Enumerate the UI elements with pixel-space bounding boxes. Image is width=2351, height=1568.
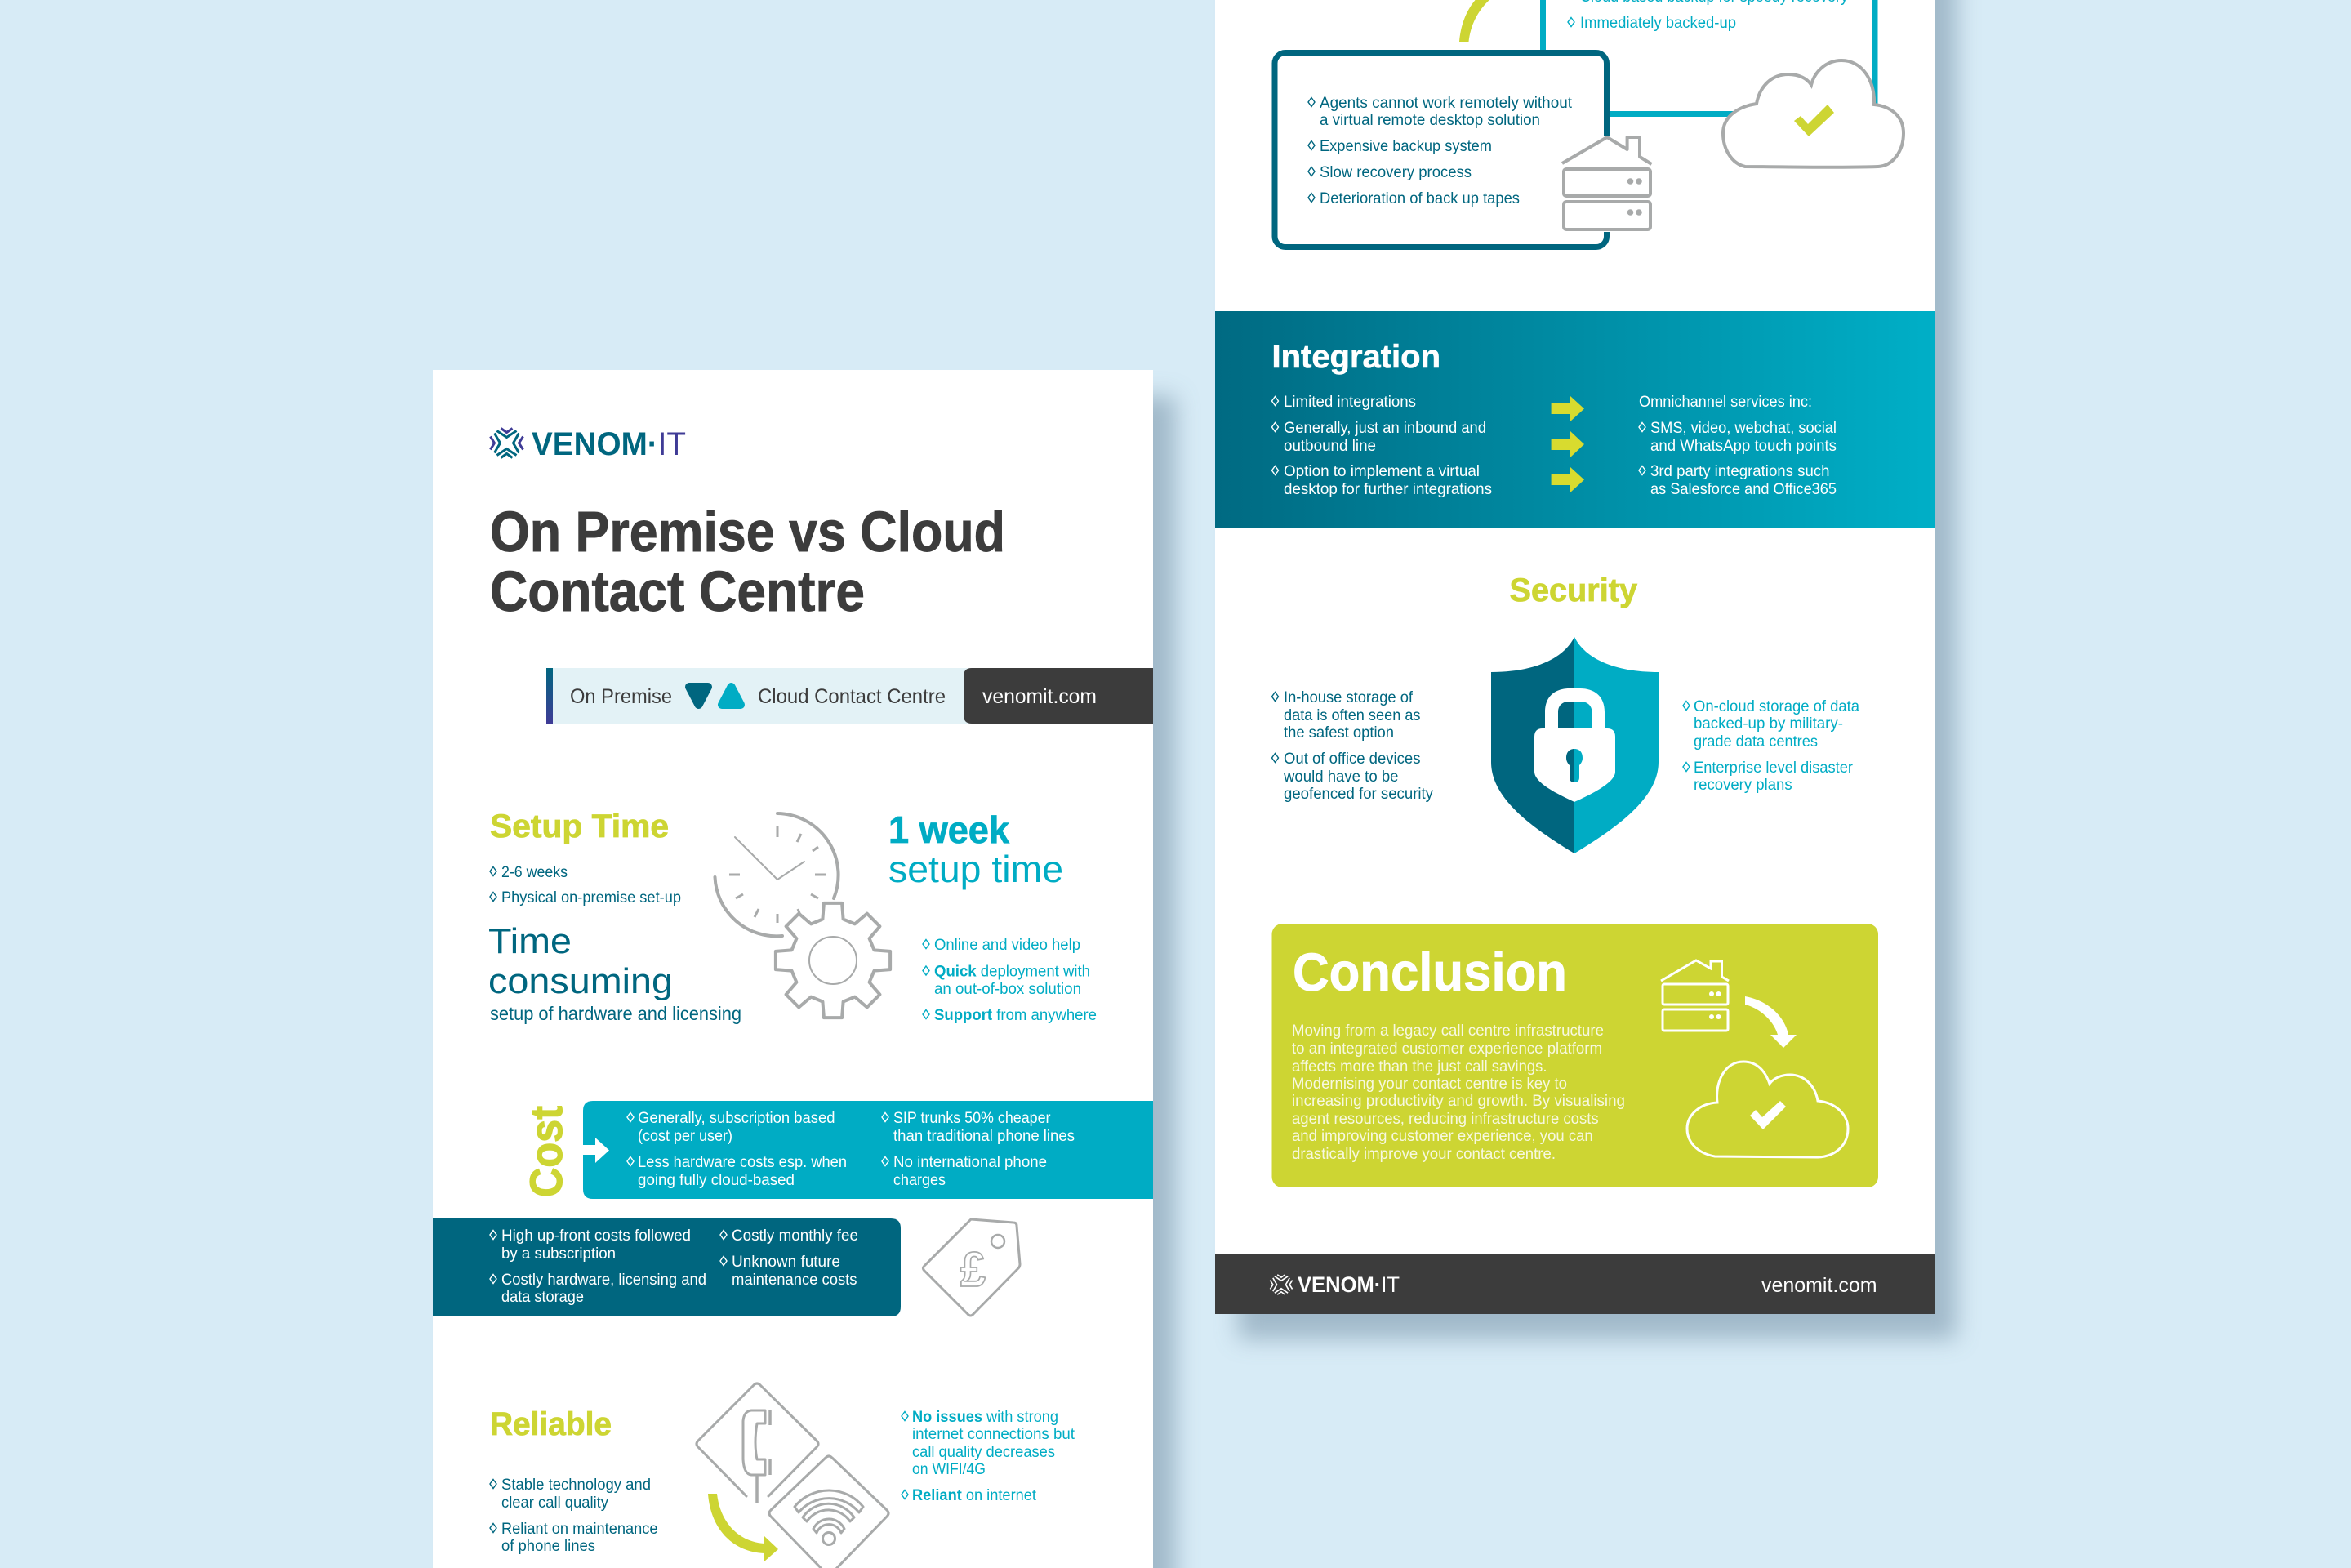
panel shadow: right	[1238, 0, 1957, 1339]
list: on premise cost left: data storage	[501, 1289, 584, 1306]
list: cloud setup: an out-of-box solution	[934, 981, 1081, 998]
list: on premise reliability: of phone lines	[501, 1538, 595, 1555]
footer bar	[1215, 1254, 1935, 1314]
list: on premise reliability: clear call quality	[501, 1494, 608, 1512]
list: cloud cost right: No international phone	[893, 1154, 1047, 1171]
list: cloud integration: and WhatsApp touch points	[1650, 438, 1837, 455]
list: cloud setup	[923, 937, 1097, 1024]
list: on premise integration: outbound line	[1284, 438, 1376, 455]
list: on premise cost left	[490, 1227, 706, 1306]
list: on premise security: would have to be	[1283, 768, 1398, 786]
panel: conclusion	[1272, 924, 1878, 1187]
list: cloud cost left	[627, 1110, 847, 1189]
text: conclusion body: to an integrated customer experience platform	[1292, 1040, 1602, 1058]
list: cloud reliability: call quality decreases	[912, 1444, 1055, 1461]
list: on premise cost right: Costly monthly fee	[732, 1227, 858, 1245]
cloud backup frame	[1543, 0, 1875, 114]
panel: left infographic page	[433, 370, 1153, 1568]
list: on premise cost right	[720, 1227, 858, 1289]
icon: cloud white	[1687, 1062, 1848, 1157]
list: on premise backup: a virtual remote desktop solution	[1320, 112, 1540, 129]
list: on premise integration: Limited integrations	[1284, 394, 1416, 411]
title: On Premise vs Cloud	[490, 500, 1005, 564]
list: cloud reliability: Reliant on internet	[912, 1487, 1037, 1504]
text: conclusion body: Modernising your contact centre is key to	[1292, 1076, 1567, 1093]
list: cloud security: recovery plans	[1694, 777, 1792, 794]
list: cloud integration: as Salesforce and Office365	[1650, 481, 1837, 498]
text: conclusion body: drastically improve your contact centre.	[1292, 1146, 1556, 1163]
heading: Reliable: Reliable	[490, 1406, 612, 1442]
icon: price tag	[923, 1219, 1020, 1316]
callout: time consuming: Time	[488, 921, 572, 961]
heading: Security: Security	[1509, 572, 1638, 608]
icon: price tag: £	[960, 1242, 986, 1297]
list: cloud cost left: Less hardware costs esp. when	[638, 1154, 847, 1171]
heading: Cost (vertical): Cost	[520, 1106, 572, 1197]
icon: clock	[715, 813, 839, 936]
list: cloud security	[1683, 698, 1859, 794]
list: cloud security: backed-up by military-	[1694, 715, 1843, 733]
list: cloud setup: Online and video help	[934, 937, 1080, 954]
list: cloud integration: Omnichannel services inc:	[1639, 394, 1812, 411]
text: conclusion body: increasing productivity and growth. By visualising	[1292, 1093, 1625, 1110]
list: cloud security: grade data centres	[1694, 733, 1818, 751]
callout: time consuming: setup of hardware and licensing	[490, 1003, 741, 1024]
list: on premise backup: Deterioration of back up tapes	[1320, 190, 1520, 207]
icon: shield with padlock	[1491, 637, 1659, 853]
arrow: lime curve fragment	[1459, 0, 1491, 42]
list: on premise integration: Generally, just an inbound and	[1284, 420, 1486, 437]
callout: time consuming: consuming	[488, 961, 673, 1001]
callout: 1 week setup time	[888, 808, 1063, 890]
title: Contact Centre	[490, 559, 865, 623]
heading: Conclusion: Conclusion	[1293, 942, 1567, 1002]
list: on premise security: Out of office devices	[1284, 751, 1421, 768]
list: on premise reliability	[490, 1477, 658, 1555]
arrows: integration	[1552, 396, 1584, 492]
arrow: to cloud	[1745, 996, 1797, 1048]
title	[490, 500, 1005, 623]
list: cloud setup: Support from anywhere	[934, 1007, 1097, 1024]
list: on premise setup: Physical on-premise set-up	[501, 889, 681, 906]
list: on premise cost right: maintenance costs	[732, 1272, 857, 1289]
callout: time consuming	[488, 921, 741, 1024]
panel: on premise cost	[433, 1218, 901, 1316]
icon: on premise server house	[1561, 136, 1653, 232]
text: conclusion body: agent resources, reducing infrastructure costs	[1292, 1111, 1599, 1128]
list: cloud security: On-cloud storage of data	[1694, 698, 1859, 715]
list: cloud integration: 3rd party integrations such	[1650, 463, 1829, 480]
list: cloud backup: Immediately backed-up	[1580, 15, 1736, 32]
callout: 1 week setup time: 1 week	[888, 808, 1009, 851]
list: cloud integration	[1639, 394, 1837, 498]
panel: on premise backup	[1275, 52, 1607, 247]
icon: gear	[776, 903, 890, 1018]
list: cloud cost right	[882, 1110, 1075, 1189]
panel shadow: left	[457, 396, 1176, 1568]
icon: cloud with check	[1723, 60, 1904, 167]
list: on premise backup: Slow recovery process	[1320, 164, 1472, 181]
legend bar: Cloud Contact Centre	[758, 685, 946, 708]
list: cloud setup: Quick deployment with	[934, 964, 1090, 980]
arrow: phone to wifi	[708, 1494, 778, 1561]
list: on premise backup: Expensive backup system	[1320, 138, 1492, 155]
text: conclusion body: and improving customer experience, you can	[1292, 1128, 1593, 1145]
list: cloud reliability: internet connections but	[912, 1426, 1075, 1443]
list: on premise integration: desktop for further integrations	[1284, 481, 1492, 498]
callout: 1 week setup time: setup time	[888, 848, 1063, 890]
list: on premise security: geofenced for security	[1284, 786, 1433, 803]
legend bar: On Premise	[570, 685, 672, 708]
text: conclusion body: affects more than the just call savings.	[1292, 1058, 1547, 1076]
heading: Integration: Integration	[1272, 339, 1440, 375]
list: on premise integration: Option to implement a virtual	[1284, 463, 1480, 480]
list: cloud cost right: than traditional phone lines	[893, 1128, 1075, 1145]
logo: footer: VENOM·IT	[1298, 1272, 1400, 1297]
panel: cloud cost	[583, 1101, 1153, 1199]
list: on premise cost left: High up-front costs followed	[501, 1227, 691, 1245]
list: on premise reliability: Reliant on maintenance	[501, 1521, 658, 1538]
list: on premise integration	[1272, 394, 1492, 498]
legend bar: venomit.com	[982, 685, 1097, 708]
section: integration	[1215, 311, 1935, 528]
list: on premise backup: Agents cannot work remotely without	[1320, 95, 1573, 112]
logo: Venom IT: VENOM·IT	[532, 426, 686, 462]
list: cloud cost right: SIP trunks 50% cheaper	[893, 1110, 1051, 1127]
list: cloud cost left: going fully cloud-based	[638, 1172, 795, 1189]
list: cloud cost left: (cost per user)	[638, 1128, 732, 1145]
list: cloud reliability: on WIFI/4G	[912, 1461, 986, 1478]
heading: Setup Time: Setup Time	[490, 808, 669, 844]
list: cloud cost left: Generally, subscription based	[638, 1110, 835, 1127]
list: cloud reliability	[902, 1409, 1075, 1504]
list: on premise security: In-house storage of	[1284, 689, 1414, 706]
list: cloud backup	[1568, 0, 1848, 32]
arrow: cost	[583, 1138, 609, 1163]
list: on premise backup	[1308, 95, 1573, 207]
list: on premise setup	[490, 864, 681, 906]
list: cloud integration: SMS, video, webchat, social	[1650, 420, 1837, 437]
list: cloud reliability: No issues with strong	[912, 1409, 1058, 1426]
icon: phone	[697, 1383, 818, 1503]
footer url: venomit.com	[1761, 1274, 1877, 1297]
list: on premise security: the safest option	[1284, 724, 1394, 742]
text: conclusion body	[1292, 1022, 1625, 1163]
panel: right infographic page	[1215, 0, 1935, 1314]
list: cloud cost right: charges	[893, 1172, 946, 1189]
list: on premise reliability: Stable technology and	[501, 1477, 651, 1494]
list: on premise cost left: by a subscription	[501, 1245, 616, 1263]
icon: server house white	[1661, 960, 1729, 1031]
list: on premise security	[1272, 689, 1433, 803]
list: on premise setup: 2-6 weeks	[501, 864, 568, 881]
text: conclusion body: Moving from a legacy call centre infrastructure	[1292, 1022, 1604, 1040]
list: on premise cost right: Unknown future	[732, 1254, 840, 1271]
list: on premise cost left: Costly hardware, licensing and	[501, 1272, 706, 1289]
icon: wifi	[769, 1456, 888, 1568]
list: cloud security: Enterprise level disaster	[1694, 760, 1854, 777]
list: on premise security: data is often seen as	[1284, 707, 1421, 724]
legend bar	[546, 668, 1153, 724]
